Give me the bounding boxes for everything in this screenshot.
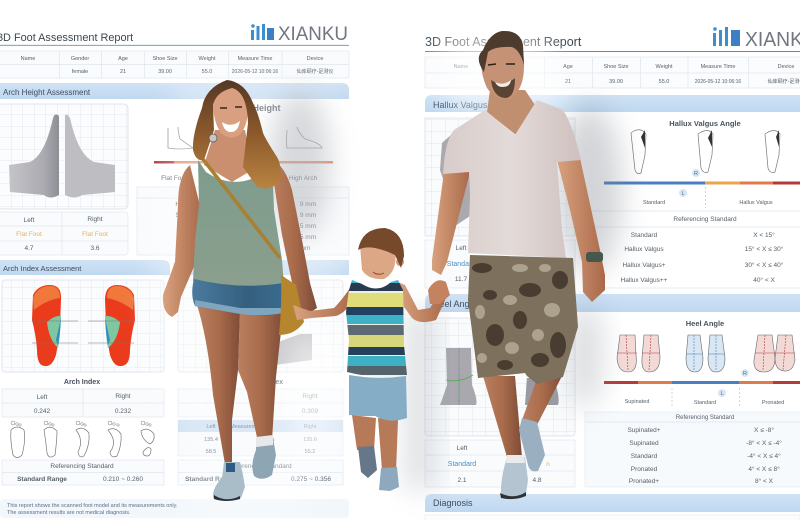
info table right: 39.00: [609, 79, 623, 85]
person: woman: [163, 80, 317, 501]
arch index values left: [2, 389, 164, 417]
heel scale bar: R: [743, 371, 747, 377]
hallux scale bar: R: [694, 171, 698, 177]
footprint pressure panel: [2, 280, 164, 372]
measurement table right: Left: [206, 424, 216, 430]
man face: [481, 41, 524, 99]
info table left: [0, 51, 349, 78]
info table right: Name: [454, 64, 468, 70]
info table right: 21: [565, 79, 571, 85]
band: heel angle: Heel Angle: [433, 299, 477, 309]
logo left: XIANKU: [278, 24, 348, 45]
neck and chest: [204, 130, 252, 182]
arch height values table: Flat Foot: [16, 231, 42, 238]
heel values table: Standard: [448, 461, 476, 468]
heel scale bar: [604, 369, 800, 408]
right shoe: [252, 435, 276, 479]
arch height scale panel: High Arch: [289, 175, 317, 182]
man arms: [432, 172, 470, 275]
measurement table right: sition: [262, 437, 274, 443]
child shoes: [358, 446, 399, 491]
info table right: Measure Time: [701, 64, 735, 70]
arch height reference table: Stan: [175, 212, 189, 219]
person: man: [428, 31, 605, 499]
measurement table right: Right: [304, 424, 317, 430]
referencing standard left: 0.210 ~ 0.260: [103, 476, 143, 483]
hallux reference table: Standard: [631, 232, 658, 239]
heel angle panel: Heel Angle: [686, 319, 724, 328]
disclaimer note: [0, 499, 349, 518]
hallux reference table: 40° < X: [753, 276, 775, 284]
tank top: [193, 158, 284, 288]
arch index label: Arch Index: [64, 379, 100, 386]
heel scale bar: Pronated: [762, 400, 784, 406]
crossbody strap: [202, 158, 280, 258]
child shorts: [349, 375, 407, 421]
heel values table: n: [546, 461, 550, 468]
arch index values left: Right: [115, 393, 131, 400]
hallux values table: 11.7: [455, 276, 467, 283]
hallux reference table: 15° < X ≤ 30°: [745, 245, 784, 253]
arch height foot model panel: [0, 104, 128, 209]
heel scale bar: Standard: [694, 400, 716, 406]
info table right: 55.0: [659, 79, 669, 85]
info table left: Device: [307, 56, 323, 62]
arch index label right: Arch Index: [247, 379, 283, 386]
heel reference table: Supinated: [629, 440, 659, 447]
second footprint panel: [178, 280, 343, 372]
arch height reference table: 9 mm: [300, 212, 316, 219]
legs: [197, 305, 240, 470]
info table right: Weight: [655, 64, 673, 70]
referencing standard left: Standard Range: [17, 476, 67, 483]
heel values table: [425, 440, 575, 487]
arch height reference table: Fla: [175, 245, 185, 252]
arch height scale panel: Arch Height: [229, 103, 281, 113]
info table right: [425, 57, 800, 88]
hallux scale bar: Hallux Valgus: [739, 200, 773, 206]
heel reference table: Standard: [631, 453, 658, 460]
hallux values table: Standard: [447, 261, 475, 268]
info table right: 2026-05-12 10:06:16: [695, 79, 741, 85]
man neck: [487, 90, 535, 135]
hallux valgus angle panel: [590, 112, 800, 288]
arch height reference table: 5 mm: [300, 234, 316, 241]
band: arch index: Arch Index Assessment: [3, 264, 82, 273]
info table left: Shoe Size: [152, 56, 178, 62]
info table left: Weight: [198, 56, 216, 62]
measurement table right: Measurement: [230, 424, 264, 430]
denim shorts: [192, 279, 283, 316]
hallux scale bar: [604, 169, 800, 208]
heel reference table: X ≤ -8°: [754, 426, 774, 434]
info table right: Shoe Size: [603, 64, 629, 70]
referencing standard right: 0.275 ~ 0.356: [291, 476, 331, 483]
heel reference table: 8° < X: [755, 477, 774, 485]
heel values table: 4.8: [532, 477, 542, 484]
referencing standard right: Referencing Standard: [228, 463, 292, 470]
heel reference table: -8° < X ≤ -4°: [746, 439, 782, 447]
hallux reference table: Hallux Valgus+: [622, 262, 666, 269]
info table left: Gender: [71, 56, 89, 62]
referencing standard left: Referencing Standard: [50, 463, 114, 470]
info table right: Age: [563, 64, 573, 70]
heel reference table: [585, 412, 800, 487]
measurement table right: 135.6: [303, 437, 317, 443]
referencing standard right: Standard Range: [185, 476, 235, 483]
info table left: Name: [21, 56, 35, 62]
disclaimer note: The assessment results are not medical diagnosis.: [7, 510, 131, 516]
child arm left: [293, 285, 354, 320]
heel scale bar: Supinated: [625, 399, 649, 405]
info table left: 39.00: [158, 69, 172, 75]
hallux foot icons: [631, 130, 780, 174]
man back shoe: [519, 418, 545, 471]
man front shoe: [500, 455, 528, 499]
info table right: Device: [778, 64, 794, 70]
arch height reference table: Flat: [178, 223, 189, 230]
arch height values table: Flat Foot: [82, 231, 108, 238]
band: arch height: Arch Height Assessment: [3, 88, 91, 97]
hallux values table: [425, 240, 575, 288]
info table left: 55.0: [202, 69, 212, 75]
arch height values table: 4.7: [24, 245, 34, 252]
man t-shirt: [443, 100, 581, 258]
info table left: 仙库颐疗-足测仪: [297, 68, 333, 75]
report title left: 3D Foot Assessment Report: [0, 32, 133, 44]
shadow haze behind people: [150, 30, 622, 520]
info table left: 21: [120, 69, 126, 75]
man legs: [483, 376, 522, 457]
mustard bag: [279, 275, 304, 335]
arch index values left: Left: [37, 394, 48, 401]
hallux reference table: Hallux Valgus++: [621, 277, 668, 284]
hallux reference table: 30° < X ≤ 40°: [745, 261, 784, 269]
heel reference table: 4° < X ≤ 8°: [748, 465, 780, 473]
hallux reference table: Hallux Valgus: [624, 246, 664, 253]
hallux scale bar: Standard: [643, 200, 665, 206]
measurement table right: 55.2: [305, 449, 315, 455]
arch index values right: [178, 389, 343, 417]
camouflage shorts: [468, 255, 578, 384]
arch height scale panel: [154, 103, 333, 182]
band: hallux valgus: [425, 95, 800, 112]
referencing standard left: [2, 460, 164, 485]
diagnosis panel: [425, 515, 800, 520]
band: arch height: [0, 83, 349, 99]
heel reference table: Referencing Standard: [676, 415, 734, 421]
face: [213, 88, 248, 138]
measurement table right: [178, 420, 343, 456]
child arm right: [398, 282, 446, 322]
arch index values right: Right: [302, 393, 318, 400]
arch height reference table: 5 mm: [300, 223, 316, 230]
hallux reference table: X < 15°: [753, 231, 775, 239]
band: diagnosis: [425, 494, 800, 512]
arch height reference table: Flat: [178, 234, 189, 241]
measurement table right: 58.5: [206, 449, 216, 455]
heel values table: Left: [457, 445, 468, 452]
band: diagnosis: Diagnosis: [433, 498, 473, 508]
band: arch index right: [173, 260, 349, 275]
measurement table right: 135.4: [204, 437, 218, 443]
arch height values table: Right: [87, 216, 103, 223]
arch index values left: 0.232: [115, 408, 132, 415]
left shoe: [213, 462, 245, 501]
heel values table: 2.1: [457, 477, 467, 484]
heel reference table: Supinated+: [627, 427, 661, 434]
arch height reference table: High: [175, 201, 189, 208]
arch height values table: Left: [24, 217, 35, 224]
left report: [0, 24, 349, 518]
arms: [163, 165, 201, 317]
arch index values left: 0.242: [34, 408, 51, 415]
striped shirt: [346, 280, 407, 377]
info table left: female: [72, 69, 88, 75]
arch height values table: [0, 212, 128, 255]
arch index values right: 0.309: [302, 408, 319, 415]
logo right: [713, 27, 800, 51]
child face: [360, 241, 396, 279]
hallux scale bar: L: [681, 191, 685, 197]
arch height reference table: [137, 187, 349, 255]
heel foot diagrams: [617, 335, 795, 372]
clasped hands: [428, 280, 450, 304]
hallux values table: Left: [456, 245, 467, 252]
foot type outlines: [11, 421, 154, 458]
arch height scale panel: Flat Foot: [161, 175, 187, 182]
person: child: [293, 228, 446, 491]
hallux reference table: Referencing Standard: [673, 216, 737, 223]
band: heel angle: [425, 294, 800, 312]
child legs: [352, 415, 376, 450]
hallux valgus angle panel: Hallux Valgus Angle: [669, 119, 741, 128]
arch height reference table: mm: [300, 245, 310, 252]
heel reference table: Pronated+: [629, 478, 659, 485]
band: hallux valgus: Hallux Valgus: [433, 100, 488, 110]
heel scale bar: L: [720, 391, 724, 397]
heel reference table: Pronated: [631, 466, 658, 473]
referencing standard right: [178, 460, 343, 485]
heel angle panel: [585, 312, 800, 487]
right report: [425, 27, 800, 520]
info table left: Age: [118, 56, 128, 62]
hallux reference table: [590, 211, 800, 288]
arch height reference table: 9 mm: [300, 201, 316, 208]
heel foot model panel: [425, 318, 575, 436]
info table left: Measure Time: [238, 56, 272, 62]
heel reference table: -4° < X ≤ 4°: [747, 452, 781, 460]
disclaimer note: This report shows the scanned foot model and its measurements only.: [7, 503, 178, 509]
band: arch index: [0, 260, 170, 275]
hallux foot model panel: [425, 118, 575, 236]
arch height values table: 3.6: [90, 245, 100, 252]
hair: [193, 80, 281, 188]
report title right: 3D Foot Assessment Report: [425, 35, 582, 49]
info table left: 2026-05-12 10:06:16: [232, 69, 278, 75]
